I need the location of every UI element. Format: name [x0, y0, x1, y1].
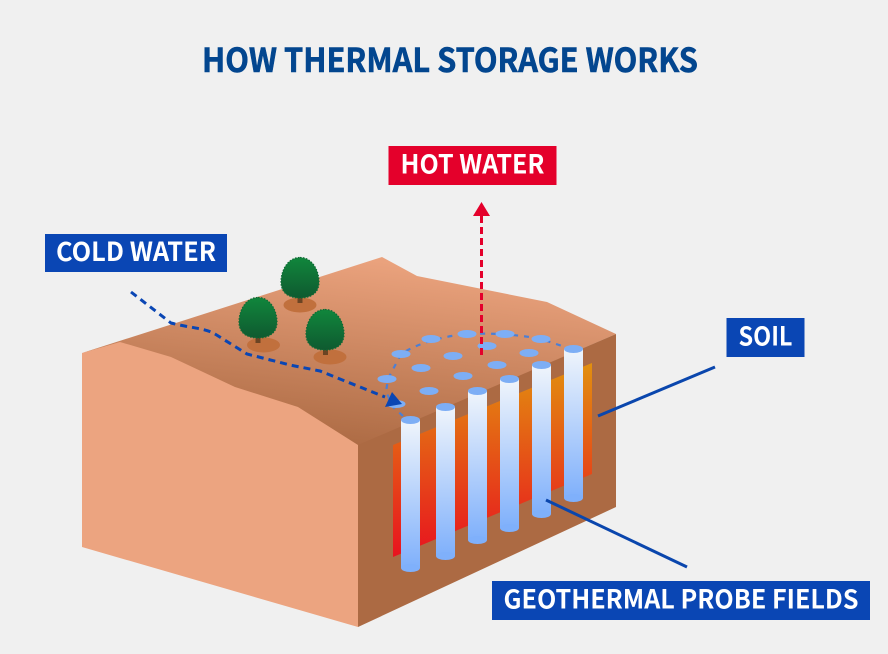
title: HOW THERMAL STORAGE WORKS	[202, 34, 698, 82]
heat panel	[393, 363, 592, 557]
probe leader line	[546, 500, 687, 567]
probe 4	[500, 375, 519, 532]
soil block	[82, 257, 616, 627]
hot water arrow	[473, 202, 490, 355]
probe 2	[436, 403, 455, 560]
label: geothermal probe fields: GEOTHERMAL PROBE FIELDS	[504, 580, 858, 616]
probe 5	[532, 361, 551, 518]
label: hot water: HOT WATER	[400, 144, 545, 182]
left face	[82, 342, 358, 627]
trees	[239, 258, 346, 364]
probe 1	[401, 416, 420, 572]
top surface	[82, 257, 616, 446]
soil leader line	[598, 367, 715, 416]
tree left	[239, 298, 280, 352]
right face	[358, 334, 616, 627]
probe field surface dots	[378, 330, 550, 408]
label: cold water: COLD WATER	[56, 232, 216, 269]
tree back	[281, 258, 319, 312]
probe 3	[468, 387, 487, 544]
geothermal probes	[401, 345, 583, 572]
cold water arrow	[131, 292, 402, 407]
tree right	[306, 310, 346, 364]
label: soil: SOIL	[738, 316, 792, 354]
probe 6	[564, 345, 583, 502]
connecting pipe dashed	[386, 334, 568, 416]
